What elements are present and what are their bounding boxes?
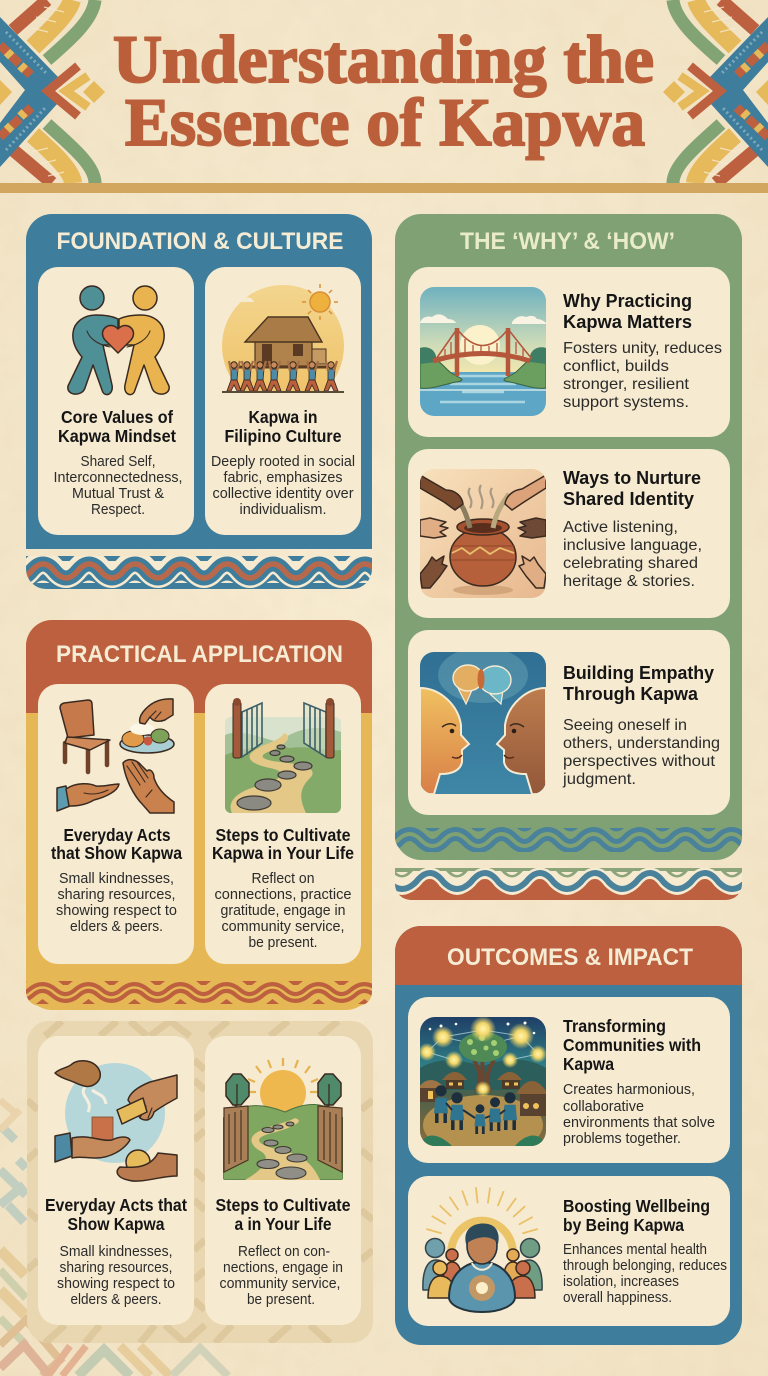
panel: foundation & culture: [26, 214, 372, 589]
card: steps to cultivate repeat: [205, 1036, 361, 1325]
card text: fabric, emphasizes: [224, 469, 342, 486]
panel: outcomes and impact: [395, 926, 742, 1345]
card text: perspectives without: [563, 753, 716, 770]
card text: Creates harmonious,: [563, 1082, 695, 1098]
card title: Shared Identity: [563, 488, 695, 509]
card title: [224, 407, 342, 446]
icon: person with sun halo and community: [423, 1187, 542, 1312]
card text: inclusive language,: [563, 537, 702, 554]
card: core values: [38, 267, 194, 535]
card title: Communities with: [563, 1035, 701, 1055]
icon: hands around clay pot: [420, 469, 546, 598]
card text: [57, 1243, 175, 1308]
card text: Respect.: [91, 501, 145, 518]
card text: [211, 453, 355, 518]
card text: community service,: [222, 918, 344, 935]
title: Essence of Kapwa: [125, 84, 645, 160]
card title: Boosting Wellbeing: [563, 1196, 710, 1216]
icon: glowing tree and village: [420, 1017, 546, 1146]
panel: repeated everyday acts and steps: [27, 1021, 373, 1343]
header rule: [0, 183, 768, 193]
card text: [562, 717, 720, 788]
icon: chair, food and hands: [57, 699, 174, 813]
card title: [216, 1195, 351, 1234]
card title: [45, 1195, 187, 1234]
card title: [212, 825, 354, 863]
card text: [563, 519, 702, 590]
panel: practical application: [26, 620, 372, 1010]
card text: heritage & stories.: [563, 573, 695, 590]
card text: [56, 870, 177, 935]
card title: Kapwa Mindset: [58, 426, 176, 446]
icon: sharing hands and food: [55, 1061, 177, 1181]
card title: Everyday Acts that: [45, 1195, 187, 1215]
icon: bridge over water: [420, 287, 546, 416]
card title: [563, 467, 701, 509]
card title: Steps to Cultivate: [216, 1195, 351, 1215]
icon: open gate and stepping stones: [225, 698, 341, 813]
card text: problems together.: [563, 1131, 681, 1147]
card title: a in Your Life: [234, 1214, 332, 1234]
card text: elders & peers.: [70, 918, 163, 935]
card title: Kapwa: [563, 1054, 614, 1074]
card text: Fosters unity, reduces: [563, 340, 722, 357]
card text: connections, practice: [214, 886, 352, 903]
card title: Kapwa in: [248, 407, 318, 427]
card title: Filipino Culture: [224, 426, 342, 446]
card text: Small kindnesses,: [60, 1243, 172, 1260]
card text: celebrating shared: [563, 555, 698, 572]
card: ways to nurture shared identity: [408, 449, 730, 618]
card text: [563, 1242, 727, 1306]
card: kapwa in filipino culture: [205, 267, 361, 535]
card text: individualism.: [240, 501, 326, 518]
card text: support systems.: [563, 394, 689, 411]
card text: Seeing oneself in: [563, 717, 687, 734]
card text: elders & peers.: [70, 1291, 162, 1308]
card text: overall happiness.: [563, 1290, 672, 1306]
heading: foundation & culture: FOUNDATION & CULTURE: [56, 228, 344, 255]
card text: environments that solve: [563, 1115, 715, 1131]
card: everyday acts: [38, 684, 194, 964]
card text: [54, 453, 182, 518]
card title: Show Kapwa: [68, 1214, 165, 1234]
card text: showing respect to: [56, 902, 177, 919]
card text: be present.: [247, 1291, 315, 1308]
icon: two people holding heart: [68, 286, 169, 395]
card title: by Being Kapwa: [563, 1215, 684, 1235]
card title: Core Values of: [61, 407, 173, 427]
card text: sharing resources,: [60, 1259, 172, 1276]
card text: sharing resources,: [58, 886, 176, 903]
card: boosting wellbeing: [408, 1176, 730, 1326]
card text: Deeply rooted in social: [211, 453, 355, 470]
card title: [563, 1016, 701, 1074]
wave divider: [395, 868, 742, 900]
card text: [563, 1082, 715, 1147]
title: Understanding the: [113, 21, 654, 97]
card text: through belonging, reduces: [563, 1258, 727, 1274]
card: everyday acts repeat: [38, 1036, 194, 1325]
card text: be present.: [248, 934, 318, 951]
card text: isolation, increases: [563, 1274, 679, 1290]
panel: the why and how: [395, 214, 742, 860]
card title: Kapwa in Your Life: [212, 843, 354, 863]
icon: two faces with overlapping speech bubbles: [420, 647, 546, 794]
card text: Reflect on con-: [238, 1243, 330, 1260]
card title: Steps to Cultivate: [216, 825, 351, 845]
card: transforming communities: [408, 997, 730, 1163]
card text: Enhances mental health: [563, 1242, 707, 1258]
decorative woven background pattern, bottom left: [0, 1100, 228, 1376]
corner ornament: right: [663, 0, 768, 183]
card title: [51, 825, 182, 863]
card text: judgment.: [562, 771, 636, 788]
heading: practical application: PRACTICAL APPLICATION: [56, 641, 343, 668]
corner ornament: left: [0, 0, 105, 183]
card title: Through Kapwa: [563, 683, 699, 704]
card title: Kapwa Matters: [563, 311, 692, 332]
card text: [220, 1243, 343, 1308]
card text: Shared Self,: [80, 453, 156, 470]
icon: bayanihan house: [222, 284, 344, 393]
card title: Everyday Acts: [64, 825, 171, 845]
card text: others, understanding: [563, 735, 720, 752]
card text: Reflect on: [252, 870, 314, 887]
card text: collaborative: [563, 1099, 644, 1115]
card text: Small kindnesses,: [59, 870, 174, 887]
card title: that Show Kapwa: [51, 843, 182, 863]
card title: Transforming: [563, 1016, 666, 1036]
card text: community service,: [220, 1275, 340, 1292]
card text: [563, 340, 722, 411]
card text: nections, engage in: [223, 1259, 343, 1276]
card: why practicing kapwa matters: [408, 267, 730, 437]
heading: outcomes and impact: OUTCOMES & IMPACT: [447, 944, 693, 971]
card title: Why Practicing: [563, 290, 692, 311]
card title: [563, 290, 692, 332]
heading: the why and how: THE ‘WHY’ & ‘HOW’: [460, 228, 675, 255]
card text: Active listening,: [563, 519, 678, 536]
icon: sunrise, trees, gate and path: [223, 1058, 343, 1180]
header: [0, 0, 768, 193]
card title: Ways to Nurture: [563, 467, 701, 488]
card title: [58, 407, 176, 446]
card text: [214, 870, 352, 951]
title: [113, 21, 654, 160]
card title: Building Empathy: [563, 662, 715, 683]
card text: Mutual Trust &: [72, 485, 164, 502]
card text: Interconnectedness,: [54, 469, 182, 486]
card text: collective identity over: [212, 485, 354, 502]
card title: [563, 1196, 710, 1235]
card text: gratitude, engage in: [220, 902, 346, 919]
card: steps to cultivate: [205, 684, 361, 964]
card text: showing respect to: [57, 1275, 175, 1292]
card text: stronger, resilient: [563, 376, 690, 393]
card title: [563, 662, 715, 704]
card text: conflict, builds: [563, 358, 669, 375]
card: building empathy through kapwa: [408, 630, 730, 815]
